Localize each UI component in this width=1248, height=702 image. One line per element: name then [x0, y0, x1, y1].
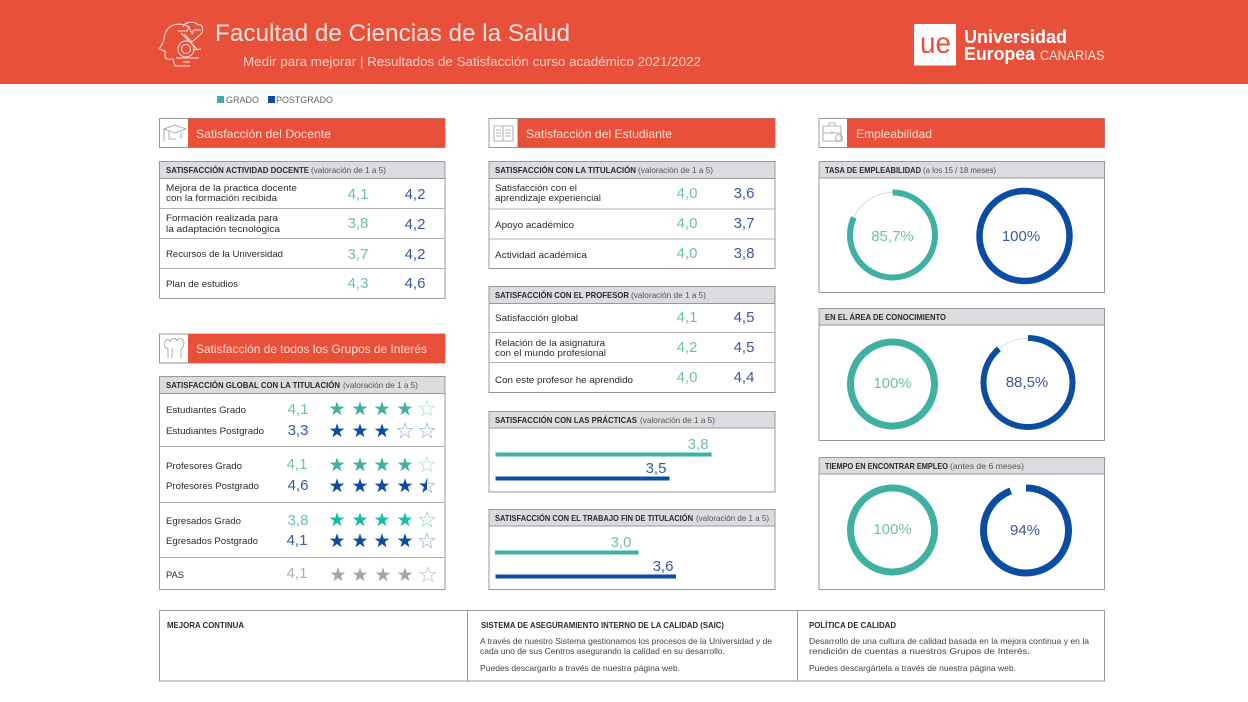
star rating: Profesores Postgrado [330, 478, 435, 492]
panel: satisfacción con el trabajo fin de titulación [489, 510, 775, 590]
section heading: Empleabilidad [819, 118, 1104, 148]
panel: satisfacción global con la titulación: Estudiantes Grado [166, 405, 246, 416]
text block: política de calidad: Desarrollo de una cultura de calidad basada en la mejora continua y en la [809, 636, 1089, 646]
panel: tasa de empleabilidad: TASA DE EMPLEABILIDAD [825, 165, 921, 175]
panel: tiempo en encontrar empleo: (antes de 6 meses) [950, 461, 1024, 471]
panel: satisfacción con la titulación: aprendizaje experiencial [495, 193, 601, 204]
panel: satisfacción con las prácticas: (valoración de 1 a 5) [640, 415, 715, 425]
panel: tasa de empleabilidad: (a los 15 / 18 meses) [923, 165, 996, 175]
text block: SAIC: A través de nuestro Sistema gestionamos los procesos de la Universidad y de [480, 636, 772, 646]
panel: satisfacción actividad docente: la adaptación tecnológica [166, 224, 281, 235]
star rating: Egresados Grado [330, 512, 435, 526]
star rating: Estudiantes Postgrado [330, 423, 435, 438]
panel: satisfacción global con la titulación: 4,1 [287, 532, 307, 549]
panel: satisfacción con el trabajo fin de titulación: 3,0 [611, 534, 631, 551]
panel: satisfacción global con la titulación: Profesores Postgrado [166, 481, 259, 492]
panel: tiempo en encontrar empleo [819, 458, 1104, 590]
section heading: Satisfacción del Estudiante [489, 118, 775, 148]
text block: política de calidad: POLÍTICA DE CALIDAD [809, 620, 896, 630]
panel: satisfacción con la titulación: (valoración de 1 a 5) [638, 165, 713, 175]
panel: satisfacción actividad docente: 4,6 [405, 275, 425, 292]
panel: satisfacción con el profesor: Con este profesor he aprendido [495, 375, 633, 386]
text block: SAIC [480, 620, 772, 673]
icon: graduation cap [164, 125, 186, 141]
text block: política de calidad [809, 620, 1089, 673]
icon: briefcase with magnifier [823, 123, 841, 141]
donut: postgrado 100% [980, 191, 1070, 281]
text block: SAIC: cada uno de sus Centros asegurando la calidad en su desarrollo. [480, 646, 725, 656]
star rating: PAS [331, 567, 436, 582]
logo: Universidad Europea Canarias: Europea [964, 44, 1036, 64]
legend: POSTGRADO [276, 95, 333, 105]
panel: satisfacción global con la titulación: Profesores Grado [166, 461, 242, 472]
panel: en el área de conocimiento [819, 308, 1104, 440]
panel: satisfacción con la titulación: 4,0 [677, 215, 697, 232]
panel: satisfacción actividad docente: 4,1 [348, 186, 368, 203]
star rating: Egresados Postgrado [330, 533, 435, 548]
panel: satisfacción global con la titulación: 3,8 [288, 512, 308, 529]
panel: satisfacción con la titulación: 4,0 [677, 185, 697, 202]
header banner [0, 0, 1248, 84]
section heading: Empleabilidad: Empleabilidad [856, 127, 932, 141]
panel: en el área de conocimiento: EN EL ÁREA DE CONOCIMIENTO [825, 312, 946, 322]
panel: satisfacción con la titulación: 3,8 [734, 245, 754, 262]
panel: satisfacción actividad docente: (valoración de 1 a 5) [311, 165, 386, 175]
panel: satisfacción con el profesor: Satisfacción global [495, 313, 578, 324]
icon: group of people [165, 338, 184, 358]
section heading: Satisfacción del Docente: Satisfacción del Docente [196, 127, 331, 141]
panel: satisfacción actividad docente: 4,2 [405, 186, 425, 203]
panel: satisfacción con el profesor: con el mundo profesional [495, 348, 606, 359]
panel: satisfacción con la titulación: Actividad académica [495, 250, 588, 261]
panel: satisfacción actividad docente: con la formación recibida [166, 193, 278, 204]
panel: satisfacción actividad docente: 4,2 [405, 216, 425, 233]
section heading: Satisfacción de todos los Grupos de Interés [160, 334, 445, 363]
panel: satisfacción global con la titulación: 3,3 [288, 422, 308, 439]
panel: satisfacción global con la titulación: PAS [166, 570, 184, 581]
panel: satisfacción con las prácticas: 3,5 [646, 460, 666, 477]
panel: satisfacción con el profesor: Relación de la asignatura [495, 338, 606, 349]
panel: satisfacción global con la titulación: (valoración de 1 a 5) [343, 380, 418, 390]
panel: satisfacción con el profesor: (valoración de 1 a 5) [631, 290, 706, 300]
panel: satisfacción con la titulación: Apoyo académico [495, 220, 574, 231]
panel: satisfacción con el profesor: 4,2 [677, 339, 697, 356]
donut: postgrado 88,5%: 88,5% [1006, 374, 1048, 391]
panel: satisfacción global con la titulación: 4,1 [287, 456, 307, 473]
panel: satisfacción con el profesor [489, 286, 775, 392]
text block: política de calidad: rendición de cuentas a nuestros Grupos de Interés. [809, 646, 1030, 656]
panel: satisfacción global con la titulación: 4,1 [287, 565, 307, 582]
panel: satisfacción con el profesor: 4,5 [734, 339, 754, 356]
section heading: Satisfacción del Docente [160, 118, 445, 148]
heading: mejora continua: MEJORA CONTINUA [167, 620, 244, 630]
donut: postgrado 88,5% [984, 338, 1072, 427]
panel: satisfacción con el trabajo fin de titulación: (valoración de 1 a 5) [696, 513, 769, 523]
panel: satisfacción global con la titulación: SATISFACCIÓN GLOBAL CON LA TITULACIÓN [166, 379, 340, 390]
panel: satisfacción global con la titulación [160, 376, 445, 590]
donut: postgrado 94% [984, 488, 1068, 573]
panel: satisfacción con el profesor: 4,5 [734, 309, 754, 326]
section heading: Satisfacción de todos los Grupos de Interés: Satisfacción de todos los Grupos de Interés [196, 342, 427, 356]
donut: postgrado 100%: 100% [1002, 228, 1040, 245]
text block: política de calidad: Puedes descargártela a través de nuestra página web. [809, 663, 1016, 673]
panel: satisfacción con la titulación [489, 162, 775, 268]
panel: satisfacción actividad docente [160, 162, 445, 298]
panel: satisfacción actividad docente: 4,3 [348, 275, 368, 292]
section heading: Satisfacción del Estudiante: Satisfacción del Estudiante [526, 127, 672, 141]
panel: satisfacción con las prácticas: 3,8 [688, 436, 708, 453]
panel: satisfacción con el trabajo fin de titulación: SATISFACCIÓN CON EL TRABAJO FIN DE TITULACIÓN [495, 512, 693, 523]
panel: satisfacción global con la titulación: Egresados Grado [166, 516, 241, 527]
panel: satisfacción con las prácticas [489, 412, 775, 492]
legend [217, 95, 333, 105]
panel: satisfacción actividad docente: Recursos de la Universidad [166, 249, 283, 260]
panel: satisfacción global con la titulación: 4,1 [288, 401, 308, 418]
logo: Universidad Europea Canarias [914, 24, 1104, 66]
panel: satisfacción actividad docente: 3,7 [348, 246, 368, 263]
panel: satisfacción global con la titulación: Estudiantes Postgrado [166, 426, 264, 437]
panel: satisfacción con la titulación: 4,0 [677, 245, 697, 262]
panel: satisfacción con el trabajo fin de titulación: 3,6 [653, 558, 673, 575]
panel: satisfacción actividad docente: Formación realizada para [166, 213, 279, 224]
donut: grado 100%: 100% [873, 521, 912, 538]
donut: grado 100% [850, 342, 934, 426]
panel: satisfacción actividad docente: Mejora de la practica docente [166, 183, 297, 194]
panel: satisfacción con el profesor: 4,0 [677, 369, 697, 386]
panel: satisfacción actividad docente: SATISFACCIÓN ACTIVIDAD DOCENTE [166, 164, 309, 175]
donut: grado 85,7%: 85,7% [871, 228, 914, 245]
donut: grado 100% [850, 488, 934, 572]
panel: satisfacción con el profesor: 4,4 [734, 369, 754, 386]
panel: satisfacción global con la titulación: Egresados Postgrado [166, 536, 258, 547]
star rating: Profesores Grado [330, 457, 435, 472]
legend: GRADO [226, 95, 259, 105]
text block: SAIC: SISTEMA DE ASEGURAMIENTO INTERNO DE LA CALIDAD (SAIC) [481, 620, 724, 630]
text block: SAIC: Puedes descargarlo a través de nuestra página web. [480, 663, 680, 673]
panel: satisfacción global con la titulación: 4,6 [288, 477, 308, 494]
donut: postgrado 94%: 94% [1010, 522, 1040, 539]
panel: tasa de empleabilidad [819, 162, 1104, 292]
panel: satisfacción actividad docente: 3,8 [348, 215, 368, 232]
logo: Universidad Europea Canarias: CANARIAS [1040, 48, 1104, 63]
panel: satisfacción con las prácticas: SATISFACCIÓN CON LAS PRÁCTICAS [495, 414, 637, 425]
logo: Universidad Europea Canarias: ue [920, 27, 951, 60]
panel: satisfacción con la titulación: 3,7 [734, 215, 754, 232]
panel: tiempo en encontrar empleo: TIEMPO EN ENCONTRAR EMPLEO [825, 461, 948, 471]
icon: head with heart and microscope [159, 22, 203, 66]
panel: satisfacción con la titulación: SATISFACCIÓN CON LA TITULACIÓN [495, 164, 636, 175]
panel: satisfacción actividad docente: 4,2 [405, 246, 425, 263]
logo: Universidad Europea Canarias: Universidad [964, 27, 1067, 47]
subtitle: Medir para mejorar | Resultados de Satisfacción curso académico 2021/2022 [243, 54, 701, 69]
donut: grado 85,7% [850, 192, 935, 278]
panel: satisfacción con el profesor: 4,1 [677, 309, 697, 326]
panel: satisfacción con el profesor: SATISFACCIÓN CON EL PROFESOR [495, 289, 629, 300]
panel: satisfacción con la titulación: Satisfacción con el [495, 183, 577, 194]
panel: mejora continua [160, 610, 1104, 681]
title: Facultad de Ciencias de la Salud [215, 20, 570, 47]
donut: grado 100%: 100% [873, 375, 912, 392]
panel: satisfacción actividad docente: Plan de estudios [166, 279, 238, 290]
panel: satisfacción con la titulación: 3,6 [734, 185, 754, 202]
icon: open book [494, 126, 513, 141]
star rating: Estudiantes Grado [330, 401, 435, 416]
